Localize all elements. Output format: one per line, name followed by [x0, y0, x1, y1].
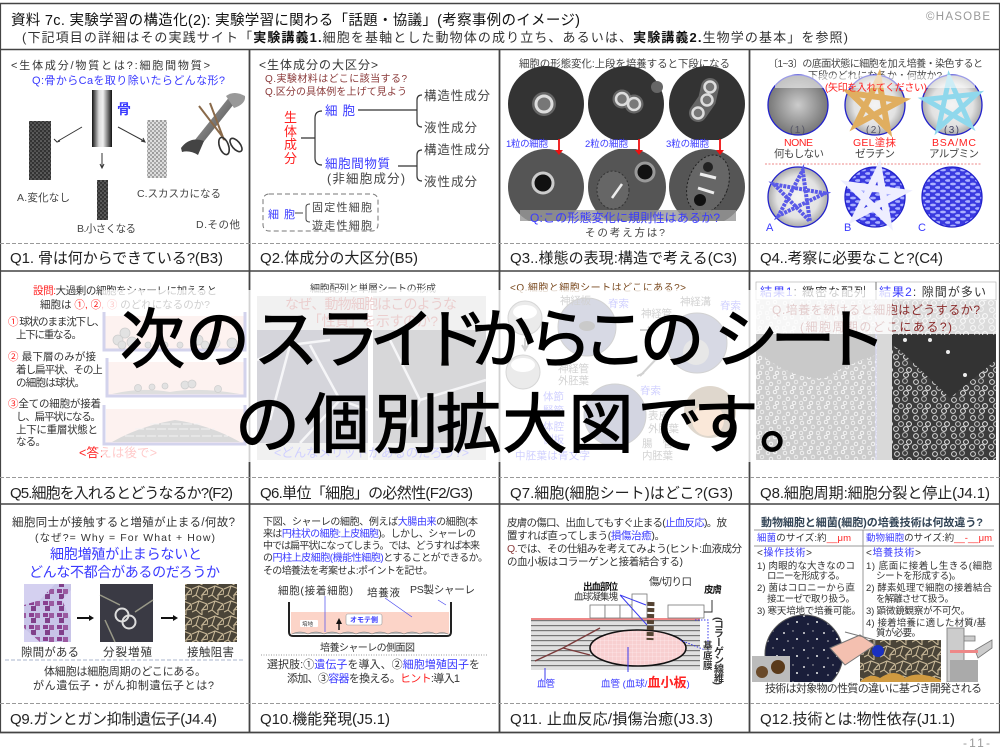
animal cell column: [866, 546, 992, 639]
image: gaps: [24, 584, 71, 642]
image captions: [21, 645, 234, 659]
Q2 questions: [265, 72, 407, 98]
question labels row 2: Q6.単位「細胞」の必然性(F2/G3): [260, 485, 473, 502]
Q10 paragraph: 来は円柱状の細胞:上皮細胞)。しかし、シャーレの: [263, 527, 476, 540]
question labels row 3: Q9.ガンとガン抑制遺伝子(J4.4): [10, 711, 217, 728]
embryo labels: ectoderm and others: [515, 294, 741, 462]
question labels row 3: [10, 711, 955, 728]
divider dots: [765, 163, 982, 165]
question labels row 3: Q12.技術とは:物性依存(J1.1): [760, 711, 955, 728]
dashed box: cell types: [263, 194, 378, 232]
embryo labels: ectoderm and others: 体腔: [543, 421, 564, 433]
panel: Q9 cancer genes: [5, 515, 245, 692]
Q2 heading: <生体成分の大区分>: [259, 58, 378, 72]
Q11 paragraph: の血小板はコラーゲンと接着結合する): [507, 555, 683, 568]
Q9 closing question: [33, 664, 214, 692]
tree labels: 細胞間物質: [325, 156, 390, 171]
Q7 heading: <Q.細胞と細胞シートはどこにある?>: [510, 281, 686, 294]
bacteria column: ロニーを形成する。: [767, 570, 845, 582]
dish side view: [289, 596, 451, 636]
translucent overlay band: [102, 290, 892, 462]
embryo labels: ectoderm and others: 内胚葉: [642, 449, 674, 462]
panel: Q7 embryo sheets: [506, 281, 741, 462]
cell-count labels: 1粒の細胞: [506, 138, 548, 150]
Q5 options: ② 最下層のみが接: [8, 350, 96, 363]
Q1 question: Q:骨からCaを取り除いたらどんな形?: [32, 73, 225, 87]
Q9 emphasis: どんな不都合があるのだろうか: [29, 564, 220, 580]
Q5 question: 設問:大過剰の細胞をシャーレに加えると: [33, 284, 217, 297]
Q11 paragraph: 置すれば直ってしまう(損傷治癒)。: [507, 529, 665, 542]
bacteria column: <操作技術>: [757, 546, 812, 559]
Q5 question: [33, 284, 217, 311]
Q6 heading: 細胞配列と単層シートの形成: [310, 282, 436, 295]
dish names: NONE: [784, 137, 813, 149]
animal cell column: 1) 底面に接着し生きる(細胞: [866, 560, 992, 572]
shape B: [97, 180, 108, 220]
option labels: C.スカスカになる: [137, 188, 221, 200]
Q10 paragraph: 下図、シャーレの細胞、例えば大腸由来の細胞(本: [263, 515, 478, 528]
wound label: 傷/切り口: [649, 575, 692, 588]
embryo labels: ectoderm and others: 神経管: [641, 307, 672, 320]
tree labels: 液性成分: [424, 121, 477, 135]
Q5 options: 上下に重なる。: [16, 328, 82, 341]
vertical label: basement membrane: [703, 640, 713, 672]
Q5 options: 上下に重層状態と: [16, 423, 98, 436]
Q4 instruction: 〔1~3〕の底面状態に細胞を加え培養・染色すると: [768, 57, 983, 70]
animal cell column: 3) 顕微鏡観察が不可欠。: [866, 605, 970, 617]
question labels row 1: Q4..考察に必要なこと?(C4): [760, 250, 943, 267]
image captions: 分裂増殖: [103, 646, 152, 659]
dish labels: 細胞(接着細胞): [278, 584, 353, 597]
Q3 sub question: その考え方は?: [585, 226, 665, 239]
Q8 question: [772, 302, 980, 334]
panel: Q5 overconfluent cells: [8, 284, 245, 460]
Q5 answer note: <答えは後で>: [79, 445, 157, 460]
panel: Q4 substrate staining: [765, 57, 983, 234]
Q9 question: 細胞同士が接触すると増殖が止まる/何故?: [12, 515, 235, 529]
Q12 heading: 動物細胞と細菌(細胞)の培養技術は何故違う?: [761, 515, 983, 529]
tree labels: [325, 89, 490, 189]
panel: Q8 cell cycle: [756, 282, 996, 460]
panel: Q10 function: [261, 515, 488, 685]
image: lifted sheet: [830, 632, 884, 665]
table lines: [754, 530, 994, 640]
arrows: [54, 127, 145, 168]
question labels row 1: [10, 250, 943, 267]
Q4 red note: (矢印を入れてください): [825, 81, 927, 94]
embryo labels: ectoderm and others: 表皮: [648, 409, 669, 422]
embryo labels: ectoderm and others: 外胚葉: [648, 422, 680, 435]
shape C: [147, 120, 167, 178]
embryo labels: ectoderm and others: 中胚葉は青文字: [515, 449, 590, 462]
panel: Q1 bone: [11, 58, 245, 235]
vertical label: collagen: (コラーゲン線維): [712, 617, 724, 685]
result letters: [766, 222, 926, 234]
bacteria column: [757, 546, 861, 617]
Q5 options: ③全ての細胞が接着: [8, 397, 101, 410]
bacteria column: 接エーゼで取り扱う。: [767, 593, 855, 605]
embryo labels: ectoderm and others: 腸管: [642, 437, 674, 450]
image: cell sheet: [860, 640, 941, 682]
caption backing: [752, 682, 994, 698]
Q10 options: [267, 657, 480, 685]
question labels row 1: Q2.体成分の大区分(B5): [260, 250, 418, 267]
Q5 options: し、扁平状になる。: [16, 410, 101, 423]
result letters: C: [918, 222, 926, 234]
Q9 emphasis: 細胞増殖が止まらないと: [50, 546, 202, 562]
caption band: [505, 221, 745, 241]
embryo diagrams: [506, 298, 736, 446]
Q10 options: 添加、③容器を換える。ヒント:導入1: [287, 671, 460, 685]
diagram labels: 皮膚: [704, 584, 722, 596]
vessel label: 血管 (血球/血小板): [601, 675, 690, 690]
Q5 options: ① 球状のまま沈下し、: [8, 315, 105, 328]
title: 資料 7c. 実験学習の構造化(2): 実験学習に関わる「話題・協議」(考察事例のイメージ): [11, 11, 580, 29]
cell-count labels: [506, 138, 709, 150]
copyright: ©HASOBE: [926, 11, 990, 23]
icon: bone and scissors: [181, 93, 245, 156]
dish names: 何もしない: [774, 147, 824, 160]
Q5 options: [8, 315, 105, 448]
Q10 paragraph: の円柱上皮細胞(機能性細胞)とすることができるか。: [263, 551, 488, 564]
dashed box: cell types: 細 胞: [268, 207, 295, 221]
Q1 heading: <生体成分/物質とは?:細胞間物質>: [11, 58, 210, 72]
dish numbers: (1): [790, 125, 805, 136]
Q3 heading: 細胞の形態変化:上段を培養すると下段になる: [519, 57, 730, 70]
diagram labels: 血管: [537, 678, 555, 690]
Q10 paragraph: [263, 515, 488, 577]
panel: Q6 cell unit necessity: [257, 282, 486, 460]
dish names: ゼラチン: [855, 148, 895, 160]
image captions: 接触阻害: [187, 645, 234, 659]
lower micrographs: [505, 140, 745, 226]
Q9 emphasis: [29, 546, 220, 580]
icon: microscope: [947, 628, 992, 682]
table header: [757, 532, 992, 544]
embryo labels: ectoderm and others: 体節: [543, 390, 564, 403]
Q8 result headers: 結果1: 緻密な配列: [760, 285, 866, 299]
panel: Q12 technology: [752, 515, 994, 698]
Q9 closing question: 体細胞は細胞周期のどこにある。: [44, 664, 206, 678]
dish numbers: (3): [944, 125, 959, 136]
dish names: [774, 136, 979, 160]
Q9 closing question: がん遺伝子・がん抑制遺伝子とは?: [33, 678, 214, 692]
vertical label: basement membrane: 底: [703, 650, 713, 662]
option labels: [17, 188, 240, 235]
tree labels: (非細胞成分): [327, 172, 405, 186]
dish diagrams: [104, 312, 245, 444]
dish side view: オモテ側: [350, 615, 378, 624]
question labels row 2: Q7.細胞(細胞シート)はどこ?(G3): [510, 485, 733, 502]
bone label: 骨: [117, 101, 131, 117]
result letters: A: [766, 222, 774, 234]
diagram labels: 血球凝集塊: [574, 591, 618, 603]
Q2 questions: Q.区分の具体例を上げて見よう: [265, 85, 407, 98]
cell-count labels: 2粒の細胞: [585, 138, 628, 150]
Q5 options: なる。: [16, 436, 46, 448]
Q2 questions: Q.実験材料はどこに該当する?: [265, 72, 407, 85]
dotted divider: [261, 654, 487, 656]
diagram labels: 出血部位: [583, 581, 618, 593]
tree labels: 細 胞: [325, 104, 355, 118]
dashed divider: [5, 659, 245, 661]
question labels row 2: Q5.細胞を入れるとどうなるか?(F2): [10, 485, 233, 502]
option labels: A.変化なし: [17, 191, 70, 204]
animal cell column: 質が必要。: [876, 627, 921, 639]
embryo labels: ectoderm and others: 側板: [543, 433, 564, 446]
overlay message: 次のスライドからこのシート: [120, 303, 887, 376]
Q6 question: [285, 296, 457, 329]
dish names: BSA/MC: [932, 137, 976, 149]
panel: Q3 cell morphology: [505, 57, 745, 241]
table header: 動物細胞のサイズ:約__-__μm: [866, 532, 992, 544]
shape A: [29, 121, 51, 180]
Q12 caption: 技術は対象物の性質の違いに基づき開発される: [765, 681, 982, 695]
tree labels: 構造性成分: [424, 89, 490, 103]
Q11 paragraph: [507, 516, 742, 568]
Q5 options: 着し扁平状、その上: [16, 363, 103, 376]
dish labels: 培養液: [367, 586, 400, 599]
option labels: B.小さくなる: [77, 223, 136, 235]
question labels row 3: Q11. 止血反応/損傷治癒(J3.3): [510, 711, 713, 728]
dish caption: 培養シャーレの側面図: [320, 641, 415, 654]
Q8 question: Q.培養を続けると細胞はどうするか?: [772, 302, 980, 317]
Q11 paragraph: 皮膚の傷口、出血してもすぐ止まる(止血反応)。放: [507, 516, 728, 529]
dish labels: [278, 583, 475, 599]
cell-count labels: 3粒の細胞: [666, 138, 709, 150]
question labels row 3: Q10.機能発現(J5.1): [260, 711, 390, 728]
page number: -11-: [963, 736, 990, 750]
animal cell column: シートを形成する)。: [876, 570, 961, 582]
Q9 why line: (なぜ?= Why = For What + How): [35, 532, 215, 544]
Q6 merit: <どんなメリットがあるのだろう?>: [274, 445, 469, 460]
panel: Q2 body components: [259, 58, 490, 232]
bacteria column: 3) 寒天培地で培養可能。: [757, 605, 861, 617]
question labels row 1: Q1. 骨は何からできている?(B3): [10, 250, 223, 267]
embryo labels: ectoderm and others: 神経溝: [680, 295, 712, 308]
dashed box: cell types: 遊走性細胞: [312, 218, 372, 232]
embryo labels: ectoderm and others: 外胚葉: [558, 374, 590, 387]
option labels: D.その他: [196, 218, 240, 231]
tree labels: 構造性成分: [424, 143, 490, 157]
animal cell column: 2) 酵素処理で細胞の接着結合: [866, 582, 992, 594]
header: title block: [11, 11, 990, 45]
Q4 instruction: [768, 57, 983, 82]
dish labels: PS製シャーレ: [410, 583, 475, 596]
Q10 paragraph: その培養法を考案せよ:ポイントを記せ。: [263, 564, 433, 577]
animal cell column: 4) 接着培養に適した材質/基: [866, 617, 986, 629]
dish names: GEL塗抹: [853, 136, 896, 149]
animal cell column: を解離させて扱う。: [876, 593, 954, 605]
question labels row 2: Q8.細胞周期:細胞分裂と停止(J4.1): [760, 485, 990, 502]
dish numbers: (2): [866, 125, 881, 136]
bacteria column: 1) 肉眼的な大きなのコ: [757, 560, 855, 572]
skin cross-section: [531, 594, 712, 680]
bacteria column: 2) 菌はコロニーから直: [757, 582, 855, 594]
image captions: 隙間がある: [21, 645, 79, 659]
Q8 micrograph left: [756, 300, 876, 460]
dashed box: cell types: 固定性細胞: [312, 200, 372, 214]
Q8 result headers: [756, 282, 996, 300]
dish side view: 培地: [302, 620, 314, 628]
vertical label: 生体成分: 分: [284, 151, 297, 166]
table header: 細菌のサイズ:約__μm: [757, 532, 851, 544]
result letters: B: [844, 222, 851, 234]
embryo labels: ectoderm and others: 脊索: [608, 297, 629, 310]
diagram labels: [537, 581, 722, 690]
Q3 question: Q:この形態変化に規則性はあるか?: [530, 210, 720, 225]
vertical label: 生体成分: 生: [284, 110, 297, 125]
Q11 paragraph: Q.では、その仕組みを考えてみよう(ヒント:血液成分: [507, 542, 742, 555]
animal cell column: <培養技術>: [866, 546, 921, 559]
embryo labels: ectoderm and others: 脊索: [720, 299, 741, 312]
Q8 question: (細胞周期のどこにある?): [800, 319, 952, 334]
tree brackets: [301, 95, 422, 181]
red arrows: [555, 139, 724, 155]
Q10 paragraph: 中では扁平状になってしまう。では、どうすれば本来: [263, 539, 480, 552]
upper micrographs: [508, 66, 745, 142]
vertical label: 生体成分: 成: [284, 137, 297, 152]
Q6 image box: [257, 296, 486, 460]
subtitle: (下記項目の詳細はその実践サイト「実験講義1.細胞を基軸とした動物体の成り立ち、あるいは、実験講義2.生物学の基本」を参照): [22, 30, 848, 45]
overlay message: の個別拡大図です。: [235, 388, 825, 461]
overlay message: [120, 303, 887, 461]
vertical label: basement membrane: 基: [703, 640, 713, 652]
image: contact inhibition: [185, 584, 237, 642]
Q8 result headers: 結果2: 隙間が多い: [879, 284, 986, 299]
vertical label: basement membrane: 膜: [703, 660, 713, 672]
lower dishes: [768, 166, 982, 227]
embryo labels: ectoderm and others: 神経板: [560, 294, 592, 307]
Q4 instruction: 下段のどれになるか・何故か?: [808, 69, 942, 82]
Q8 micrograph right: [876, 300, 996, 460]
image: culture plate: [765, 615, 843, 693]
image: colonies: [752, 656, 790, 682]
dish names: アルブミン: [929, 147, 979, 160]
vertical label: 生体成分: [284, 110, 297, 166]
arrows: [77, 615, 178, 621]
Q5 question: 細胞は ①, ②, ③ のどれになるのか?: [40, 298, 210, 311]
question labels row 2: [10, 485, 990, 502]
bone column: [92, 90, 112, 147]
embryo labels: ectoderm and others: 腎節: [543, 404, 564, 417]
upper dishes: [768, 75, 982, 135]
Q10 options: 選択肢:①遺伝子を導入、②細胞増殖因子を: [267, 657, 480, 671]
Q8 band: [756, 300, 996, 334]
question labels row 1: Q3..様態の表現:構造で考える(C3): [510, 250, 737, 267]
embryo labels: ectoderm and others: 脊索: [640, 384, 661, 397]
tree labels: 液性成分: [424, 175, 477, 189]
Q6 question: なぜ、動物細胞はこのような: [285, 296, 457, 312]
dish numbers: [790, 125, 959, 136]
embryo labels: ectoderm and others: 神経管: [558, 362, 590, 375]
vertical label: 生体成分: 体: [284, 124, 297, 139]
Q5 options: の細胞は球状。: [16, 376, 85, 389]
image: division: [100, 584, 153, 642]
Q6 question: 「性質」を示すのか?: [308, 313, 438, 329]
panel: Q11 wound healing: [507, 516, 742, 690]
